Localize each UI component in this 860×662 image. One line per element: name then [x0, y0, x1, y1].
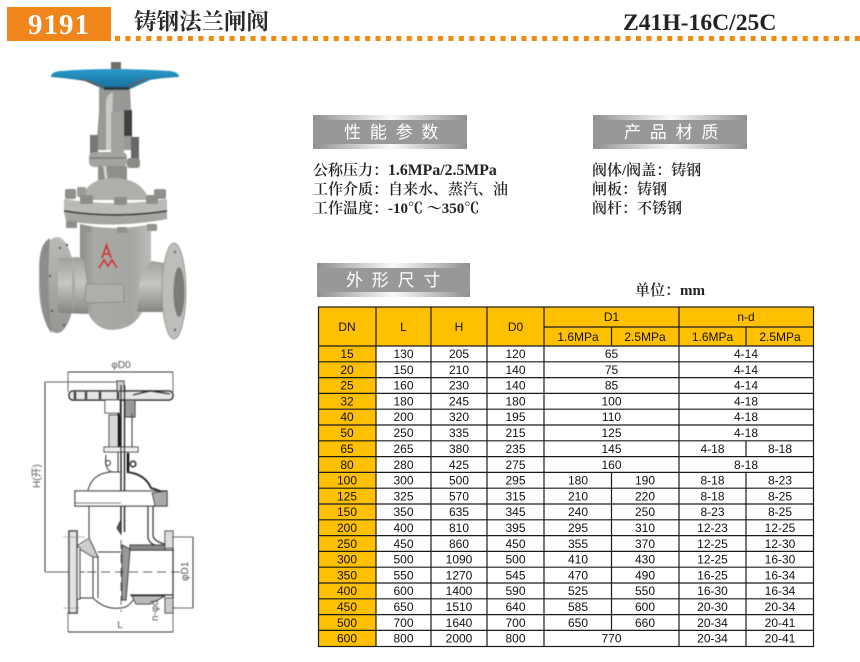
- row DN32: 245: [449, 394, 469, 408]
- row DN300: 300: [337, 552, 357, 566]
- row DN250: 450: [393, 537, 414, 551]
- row DN450: 600: [635, 600, 655, 614]
- table header row: 1.6MPa: [692, 330, 734, 344]
- row DN100: 8-23: [768, 474, 792, 488]
- row DN100: 100: [337, 474, 357, 488]
- row DN500: 1640: [446, 616, 473, 630]
- row DN150: 150: [337, 505, 357, 519]
- row DN450: 20-34: [765, 600, 796, 614]
- product photo: cast steel gate valve: [39, 62, 186, 339]
- row DN100: 180: [568, 474, 588, 488]
- dimension: handwheel diameter D0: [68, 360, 173, 392]
- row DN80: [340, 458, 758, 472]
- row DN350: 1270: [446, 568, 473, 582]
- row DN32: 32: [340, 394, 354, 408]
- row DN150: 345: [505, 505, 526, 519]
- table header row: D0: [508, 320, 523, 334]
- row DN200: 12-23: [697, 521, 728, 535]
- row DN125: [337, 490, 792, 504]
- row DN600: 800: [505, 632, 526, 646]
- row DN100: 300: [393, 474, 414, 488]
- row DN400: 1400: [446, 584, 473, 598]
- row DN450: [337, 600, 796, 614]
- row DN20: 150: [393, 363, 414, 377]
- row DN300: 410: [568, 552, 588, 566]
- table header row: 1.6MPa: [557, 330, 599, 344]
- row DN200: 310: [635, 521, 655, 535]
- row DN80: 280: [393, 458, 414, 472]
- dimension: bolt holes n-d: n-φd: [150, 600, 161, 621]
- row DN40: 110: [602, 410, 621, 424]
- row DN50: 250: [393, 426, 414, 440]
- performance parameters text: 公称压力：1.6MPa/2.5MPa: [313, 161, 497, 179]
- row DN20: 210: [449, 363, 469, 377]
- flange reference ticks: [63, 537, 85, 608]
- bonnet flange: [64, 187, 167, 228]
- performance parameters text: [313, 161, 508, 217]
- row DN350: 550: [393, 568, 414, 582]
- table header row: n-d: [737, 310, 755, 324]
- row DN40: 200: [393, 410, 414, 424]
- product materials text: 阀体/阀盖：铸钢: [592, 161, 701, 179]
- row DN350: 16-34: [765, 568, 796, 582]
- row DN400: 590: [505, 584, 526, 598]
- row DN500: 20-41: [765, 616, 796, 630]
- row DN50: 125: [601, 426, 622, 440]
- unit note: 单位：mm: [635, 282, 706, 299]
- row DN300: 16-30: [765, 552, 796, 566]
- row DN600: 2000: [446, 632, 473, 646]
- row DN500: 700: [393, 616, 414, 630]
- row DN100: 500: [449, 474, 469, 488]
- packing gland: [89, 152, 140, 186]
- row DN50: 4-18: [734, 426, 758, 440]
- row DN65: 8-18: [768, 442, 792, 456]
- row DN600: [337, 632, 796, 646]
- dimension: handwheel diameter D0: φD0: [111, 360, 131, 371]
- row DN100: 295: [505, 474, 526, 488]
- table header row: L: [400, 320, 407, 334]
- row DN500: 660: [635, 616, 655, 630]
- row DN500: 700: [505, 616, 526, 630]
- row DN350: 350: [337, 568, 357, 582]
- row DN450: 1510: [446, 600, 473, 614]
- row DN32: 180: [505, 394, 526, 408]
- dimension: flange bolt circle D1: [172, 537, 193, 608]
- stem tip: [111, 62, 121, 72]
- row DN50: 335: [449, 426, 469, 440]
- row DN20: [340, 363, 758, 377]
- product name heading: 铸钢法兰闸阀: [134, 10, 269, 34]
- bottom block: [85, 284, 124, 303]
- AM logo: [99, 245, 117, 268]
- row DN600: 20-41: [765, 632, 796, 646]
- row DN250: 860: [449, 537, 469, 551]
- product materials text: 闸板：铸钢: [592, 180, 667, 198]
- left branch pipe: [60, 257, 88, 314]
- row DN150: [337, 505, 792, 519]
- technical drawing: valve cross section: [32, 360, 193, 632]
- row DN400: 16-30: [697, 584, 728, 598]
- table header row: 2.5MPa: [759, 330, 801, 344]
- section label: performance parameters: [313, 115, 467, 149]
- row DN65: 145: [601, 442, 622, 456]
- section label: performance parameters: 性能参数: [344, 123, 447, 142]
- row DN150: 240: [568, 505, 588, 519]
- row DN400: 600: [393, 584, 414, 598]
- yoke: [90, 88, 139, 162]
- section label: product materials: [593, 115, 747, 149]
- row DN250: 370: [635, 537, 655, 551]
- section label: outline dimensions: [317, 263, 470, 297]
- section label: outline dimensions: 外形尺寸: [346, 271, 449, 290]
- row DN65: 4-18: [700, 442, 725, 456]
- row DN20: 20: [340, 363, 354, 377]
- row DN300: [337, 552, 796, 566]
- row DN25: 140: [505, 378, 526, 392]
- row DN200: 200: [337, 521, 357, 535]
- product materials text: [592, 161, 701, 217]
- row DN32: 100: [601, 394, 622, 408]
- row DN32: [340, 394, 758, 408]
- row DN25: 85: [605, 378, 618, 392]
- row DN50: 215: [505, 426, 526, 440]
- dotted header rule: [115, 36, 860, 41]
- table header row: D1: [604, 310, 619, 324]
- valve body: [80, 224, 157, 330]
- end flanges: [69, 531, 173, 613]
- row DN400: 525: [568, 584, 588, 598]
- section label: product materials: 产品材质: [624, 123, 727, 142]
- model number badge: [7, 7, 111, 41]
- table fills: [318, 307, 814, 646]
- row DN25: 4-14: [734, 378, 758, 392]
- centre lines: [87, 540, 180, 612]
- row DN125: 125: [337, 490, 357, 504]
- row DN200: 810: [449, 521, 469, 535]
- row DN50: 50: [340, 426, 354, 440]
- performance parameters text: 工作介质：自来水、蒸汽、油: [313, 180, 508, 198]
- right branch pipe: [137, 261, 165, 312]
- table grid: [318, 307, 814, 646]
- page header: [7, 7, 860, 41]
- row DN500: 500: [337, 616, 357, 630]
- row DN450: 650: [393, 600, 414, 614]
- row DN450: 585: [568, 600, 588, 614]
- left flange: [39, 237, 75, 333]
- row DN80: 8-18: [734, 458, 758, 472]
- row DN40: 320: [449, 410, 469, 424]
- row DN125: 315: [505, 490, 526, 504]
- valve body: [77, 506, 173, 608]
- row DN350: [337, 568, 796, 582]
- row DN15: 65: [605, 347, 618, 361]
- row DN500: [337, 616, 796, 630]
- row DN80: 80: [340, 458, 354, 472]
- row DN250: 250: [337, 537, 357, 551]
- row DN200: [337, 521, 796, 535]
- bonnet and flange: [75, 472, 167, 506]
- row DN125: 570: [449, 490, 469, 504]
- right flange: [162, 243, 186, 339]
- row DN100: [337, 474, 792, 488]
- row DN32: 4-18: [734, 394, 758, 408]
- dimension: height H: H(开): [32, 464, 43, 488]
- row DN200: 12-25: [765, 521, 796, 535]
- row DN15: [340, 347, 758, 361]
- row DN100: 8-18: [700, 474, 725, 488]
- row DN65: [340, 442, 792, 456]
- row DN400: 400: [337, 584, 357, 598]
- row DN100: 190: [635, 474, 655, 488]
- row DN15: 130: [393, 347, 414, 361]
- row DN125: 210: [568, 490, 588, 504]
- row DN400: [337, 584, 796, 598]
- row DN25: 230: [449, 378, 469, 392]
- model number badge: 9191: [28, 9, 90, 41]
- row DN600: 800: [393, 632, 414, 646]
- row DN250: 450: [505, 537, 526, 551]
- row DN250: 355: [568, 537, 588, 551]
- dimension: flange bolt circle D1: φD1: [180, 561, 191, 581]
- row DN25: 25: [340, 378, 354, 392]
- row DN200: 395: [505, 521, 526, 535]
- row DN300: 12-25: [697, 552, 728, 566]
- row DN300: 500: [505, 552, 526, 566]
- row DN65: 265: [393, 442, 414, 456]
- row DN65: 65: [340, 442, 354, 456]
- table header row: H: [455, 320, 463, 334]
- table header row: DN: [338, 320, 356, 334]
- row DN600: 20-34: [697, 632, 728, 646]
- row DN15: 4-14: [734, 347, 758, 361]
- row DN15: 15: [340, 347, 354, 361]
- row DN125: 325: [393, 490, 414, 504]
- row DN65: 235: [505, 442, 526, 456]
- valve stem: [117, 385, 124, 534]
- row DN40: 4-18: [734, 410, 758, 424]
- row DN200: 295: [568, 521, 588, 535]
- row DN350: 470: [568, 568, 588, 582]
- row DN80: 425: [449, 458, 469, 472]
- row DN350: 490: [635, 568, 655, 582]
- row DN250: [337, 537, 796, 551]
- dimensions table: [318, 307, 814, 646]
- model code: Z41H-16C/25C: [623, 10, 776, 36]
- row DN150: 8-25: [768, 505, 792, 519]
- row DN450: 640: [505, 600, 526, 614]
- row DN15: 205: [449, 347, 469, 361]
- table header row: 2.5MPa: [624, 330, 666, 344]
- row DN300: 1090: [446, 552, 473, 566]
- row DN350: 545: [505, 568, 526, 582]
- row DN500: 650: [568, 616, 588, 630]
- row DN40: 195: [505, 410, 526, 424]
- row DN32: 180: [393, 394, 414, 408]
- row DN50: [340, 426, 758, 440]
- row DN150: 8-23: [700, 505, 725, 519]
- row DN65: 380: [449, 442, 469, 456]
- row DN25: [340, 378, 758, 392]
- row DN500: 20-34: [697, 616, 728, 630]
- handwheel: [51, 69, 179, 90]
- performance parameters text: 工作温度：-10℃ ～350℃: [313, 200, 479, 217]
- table header row: [338, 310, 801, 344]
- row DN20: 75: [605, 363, 618, 377]
- handwheel section: [69, 381, 173, 417]
- row DN25: 160: [393, 378, 414, 392]
- dimension: length L: [68, 612, 173, 632]
- row DN150: 635: [449, 505, 469, 519]
- row DN300: 430: [635, 552, 655, 566]
- row DN80: 275: [505, 458, 526, 472]
- row DN40: 40: [340, 410, 354, 424]
- row DN350: 16-25: [697, 568, 728, 582]
- bonnet dome: [81, 178, 149, 200]
- product materials text: 阀杆：不锈钢: [592, 199, 682, 217]
- row DN20: 140: [505, 363, 526, 377]
- row DN125: 8-18: [700, 490, 725, 504]
- yoke: [104, 413, 138, 473]
- row DN150: 250: [635, 505, 655, 519]
- row DN125: 220: [635, 490, 655, 504]
- row DN300: 500: [393, 552, 414, 566]
- row DN400: 550: [635, 584, 655, 598]
- row DN600: 600: [337, 632, 357, 646]
- row DN40: [340, 410, 758, 424]
- row DN80: 160: [601, 458, 622, 472]
- row DN200: 400: [393, 521, 414, 535]
- row DN600: 770: [601, 632, 622, 646]
- row DN125: 8-25: [768, 490, 792, 504]
- dimension: length L: L: [117, 620, 123, 631]
- row DN250: 12-25: [697, 537, 728, 551]
- row DN20: 4-14: [734, 363, 758, 377]
- row DN15: 120: [505, 347, 526, 361]
- row DN450: 20-30: [697, 600, 728, 614]
- row DN150: 350: [393, 505, 414, 519]
- row DN400: 16-34: [765, 584, 796, 598]
- row DN450: 450: [337, 600, 357, 614]
- row DN250: 12-30: [765, 537, 796, 551]
